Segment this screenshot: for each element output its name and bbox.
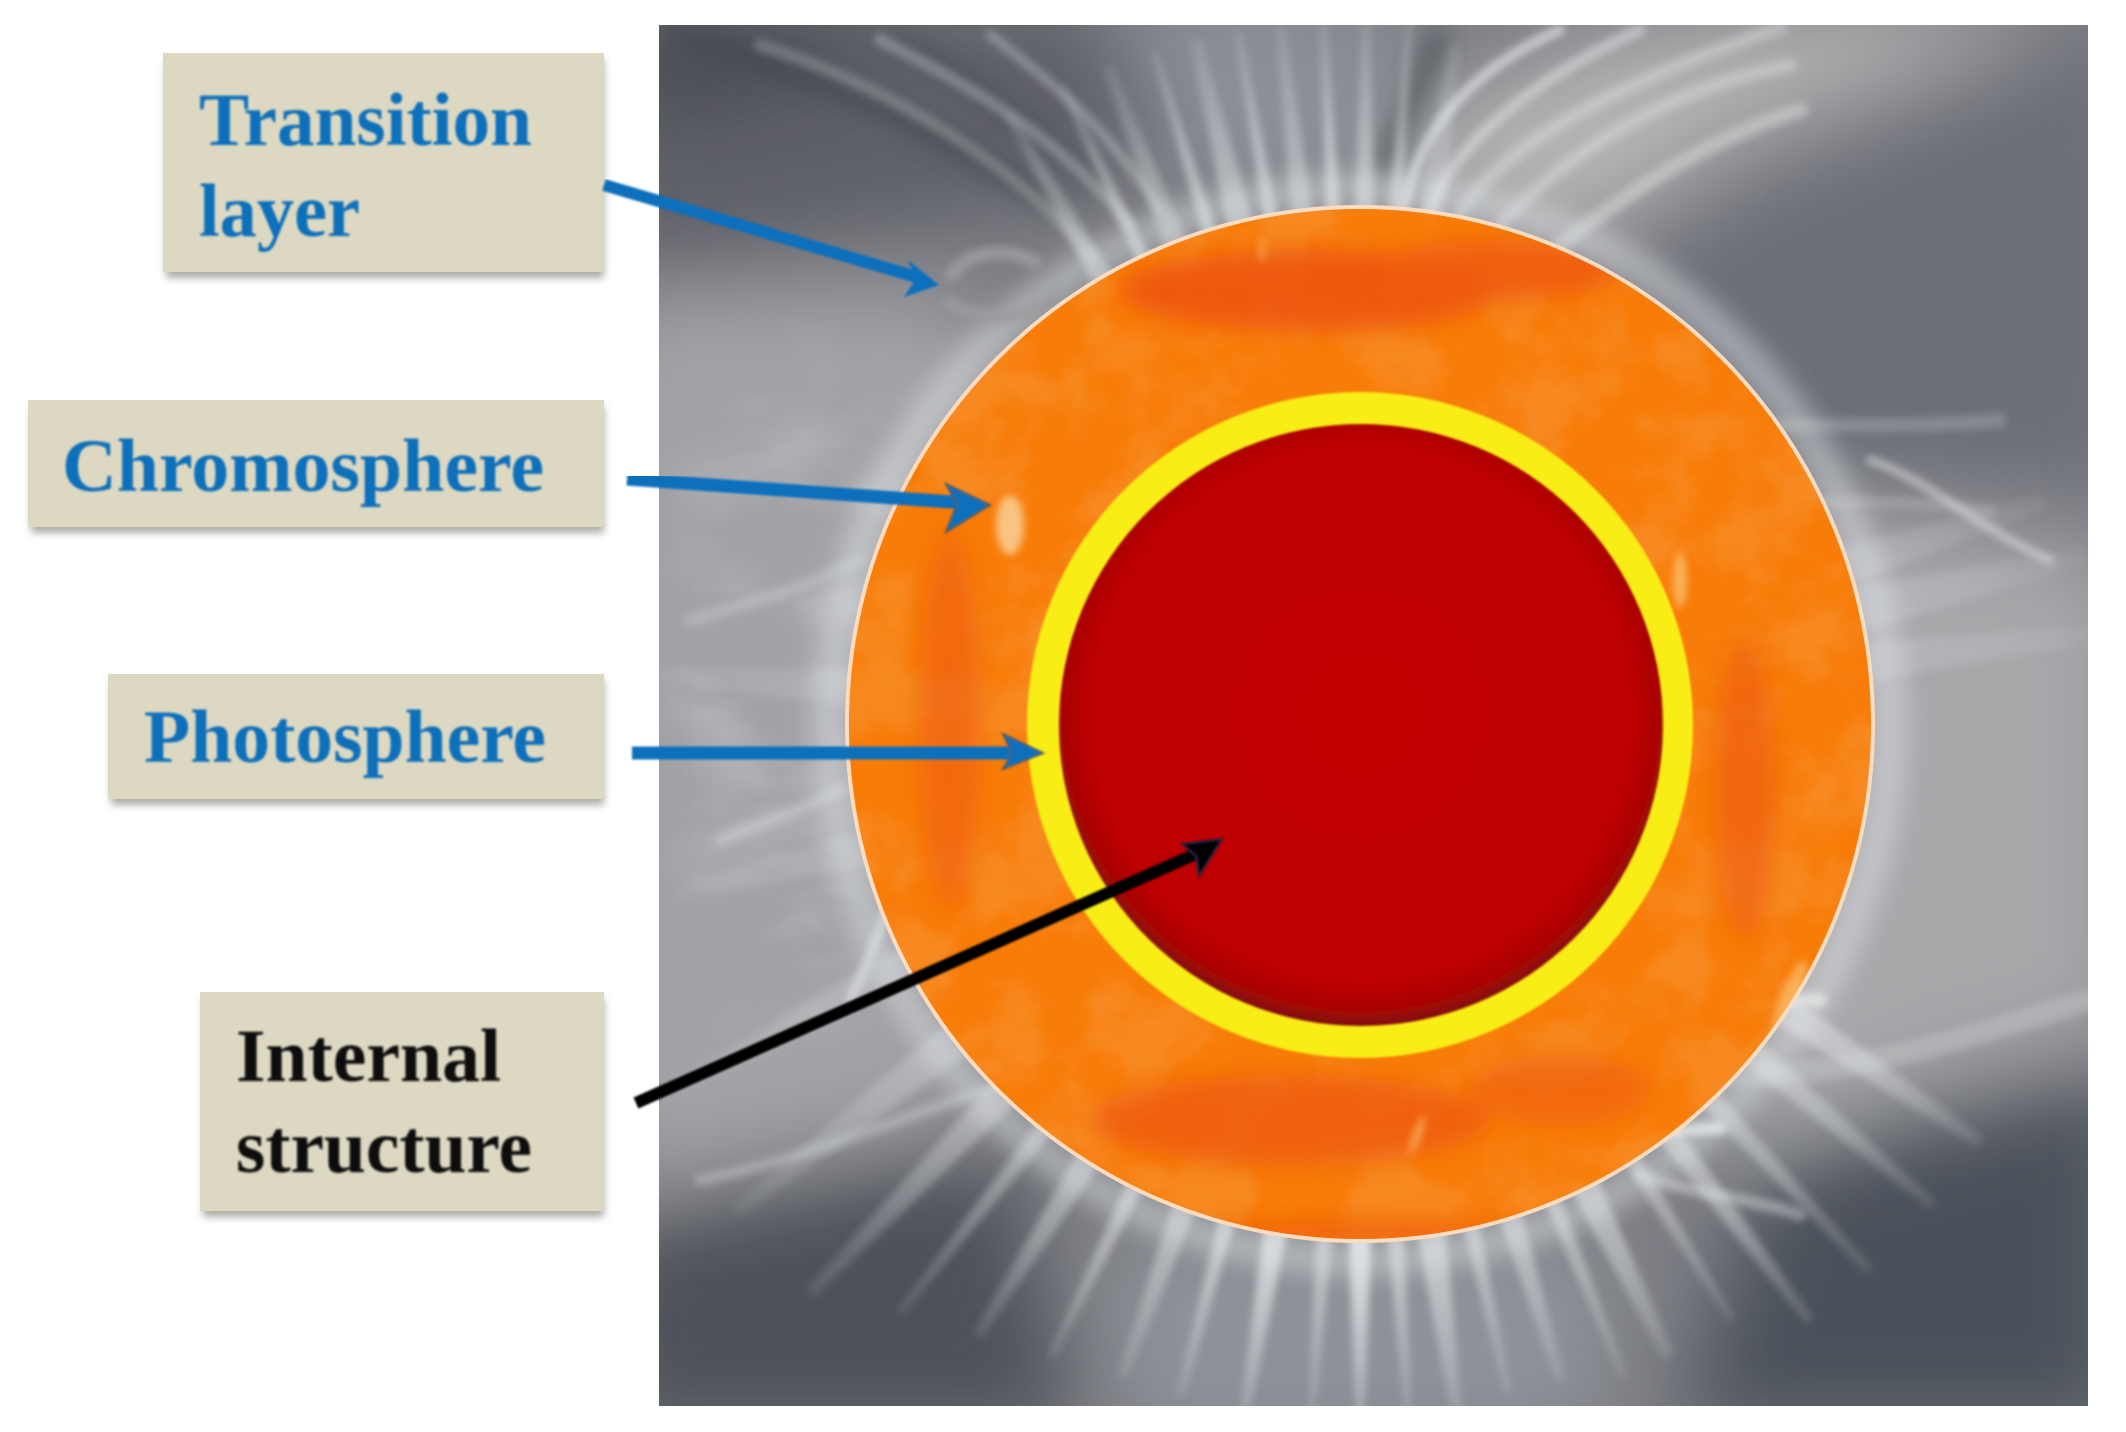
arrow: photosphere [632,734,1043,769]
radial light streaks [734,25,2023,1406]
arrow: transition layer [604,185,939,297]
label: Internal structure: structure [236,1106,532,1189]
label: Internal structure: Internal [236,1015,501,1098]
label: Transition layer: Transition [199,79,532,162]
label: Chromosphere [28,400,604,533]
label: Photosphere [108,674,604,805]
sun: red internal structure core [1059,424,1663,1026]
corona glow around the sun [830,189,1890,1259]
sun: yellow photosphere ring [1027,392,1693,1058]
arrow: internal structure [636,839,1222,1103]
sun: outer orange chromosphere disc [845,205,1875,1245]
curved corona strands [690,28,2088,1215]
dark streaks [670,28,1440,210]
label: Transition layer [163,53,604,278]
swirl near transition layer [945,253,1060,316]
cloud texture on the left side [686,430,862,844]
arrow: chromosphere [627,479,990,532]
label: Internal structure [200,992,604,1217]
label: Transition layer: layer [199,170,360,253]
label: Chromosphere: Chromosphere [62,425,544,508]
label: Photosphere: Photosphere [144,696,546,779]
panel: solar corona background [600,0,2126,1432]
